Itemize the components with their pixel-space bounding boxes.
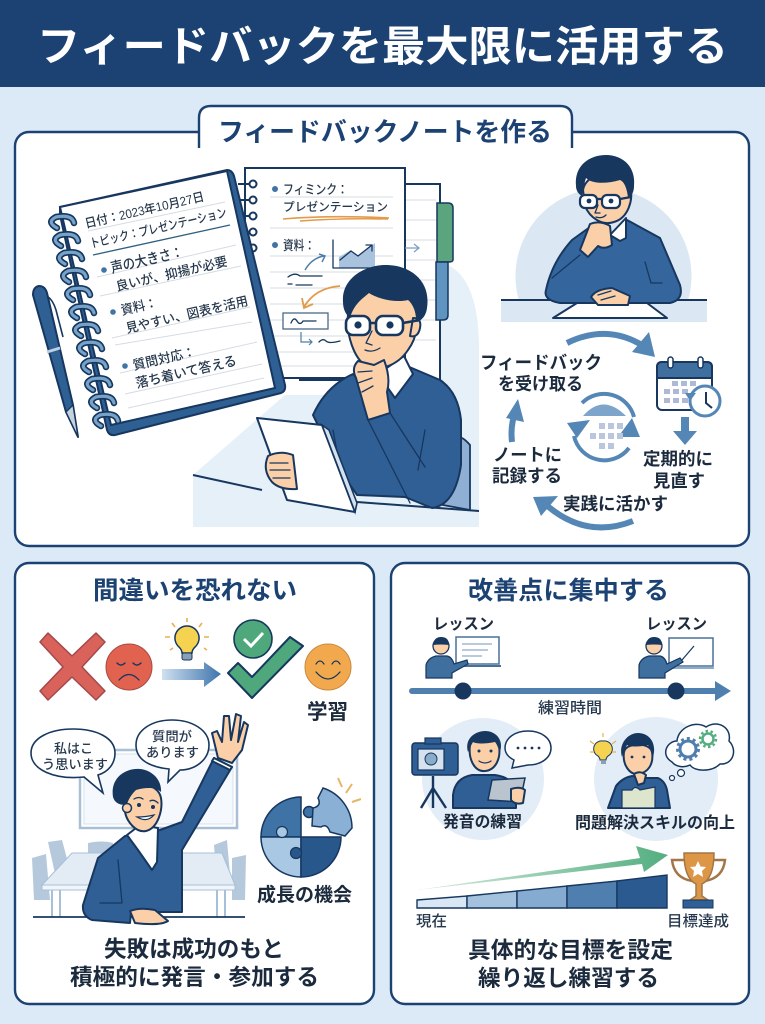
feedback cycle diagram: 実践に活かす (563, 494, 668, 514)
puzzle piece (622, 787, 655, 808)
person reading tablet (193, 265, 479, 512)
speech bubble: question (136, 720, 209, 782)
panel heading tab: フィードバックノートを作る (218, 117, 552, 147)
header band with title (0, 0, 765, 87)
open note page (238, 168, 419, 378)
notebook page (60, 171, 275, 425)
hand on chin (354, 360, 390, 420)
sweater (313, 366, 461, 508)
mini chart (333, 240, 375, 268)
collar (610, 218, 626, 241)
open note page: フィミンク： (283, 182, 348, 197)
back note sheet (300, 184, 453, 380)
heading: 改善点に集中する (468, 577, 669, 605)
feedback cycle diagram: ノートに (493, 445, 562, 465)
timeline: レッスン (433, 616, 494, 633)
speech bubble: my opinion: う思います (42, 757, 108, 772)
problem solving illustration (590, 717, 734, 841)
background blob behind man (193, 262, 479, 527)
label: problem-solving skills: 問題解決スキルの向上 (575, 814, 735, 832)
speech bubble: my opinion (31, 729, 115, 793)
label: growth opportunity: 成長の機会 (257, 883, 352, 906)
speech bubble: my opinion: 私はこ (54, 741, 93, 756)
face (125, 785, 161, 831)
icon: big check mark (228, 637, 303, 698)
panel: feedback note (15, 106, 749, 546)
orange underline (283, 217, 389, 221)
header band with title: フィードバックを最大限に活用する (37, 23, 728, 70)
open note page: プレゼンテーション (283, 199, 388, 214)
glasses (580, 195, 631, 208)
sweater (546, 220, 681, 303)
icon: green circle check (234, 620, 272, 658)
summary text: 具体的な目標を設定 (468, 938, 673, 963)
notebook with handwritten notes: 質問対応： (131, 344, 197, 373)
teacher at whiteboard right (639, 637, 714, 678)
person thinking at desk (501, 155, 707, 322)
timeline: レッスン (646, 616, 707, 633)
raised hand (212, 714, 248, 763)
summary text: 積極的に発言・参加する (70, 965, 319, 990)
binder rings (238, 180, 256, 252)
open note page: 資料： (283, 238, 315, 253)
feedback cycle diagram (480, 332, 720, 527)
chair (443, 437, 470, 510)
background circle (516, 188, 692, 300)
icon: red cross (40, 633, 105, 700)
staircase bar chart (417, 875, 667, 908)
notebook with handwritten notes: 落ち着いて答える (134, 352, 238, 391)
notebook on desk (553, 303, 667, 318)
notebook with handwritten notes (51, 170, 285, 435)
desk line (193, 475, 479, 511)
notebook with handwritten notes: 資料： (119, 295, 159, 318)
green tab (437, 203, 453, 262)
panel: don't fear mistakes (15, 563, 374, 1004)
notebook cover (60, 170, 285, 435)
blue tab (436, 262, 448, 320)
icon: puzzle sphere (261, 778, 361, 877)
summary text: 繰り返し練習する (478, 966, 659, 991)
forearm sleeve (368, 413, 425, 503)
notebook with handwritten notes: 日付：2023年10月27日 (84, 190, 206, 231)
icon: progress arrow (417, 846, 668, 890)
summary text (70, 937, 319, 990)
timeline (412, 616, 731, 717)
person (453, 775, 516, 808)
panel heading tab (199, 106, 572, 150)
hand on tablet (266, 453, 297, 489)
collar (378, 356, 413, 398)
label: learning: 学習 (307, 701, 348, 724)
icon: pen (33, 286, 78, 437)
summary text (468, 938, 673, 991)
arrow down (673, 417, 697, 445)
teacher at whiteboard left (426, 637, 501, 678)
speech bubble: question: 質問が (152, 729, 192, 744)
tablet (257, 418, 355, 512)
desk (501, 300, 707, 322)
feedback cycle diagram: 定期的に (643, 449, 713, 469)
timeline: 練習時間 (538, 699, 602, 717)
glasses (346, 316, 420, 335)
icon: light bulb (165, 618, 209, 660)
feedback cycle diagram: を受け取る (498, 374, 583, 394)
feedback cycle diagram: 見直す (653, 471, 705, 491)
hair (343, 265, 428, 322)
speech bubble (505, 731, 551, 768)
notebook with handwritten notes: 声の大きさ： (109, 243, 185, 277)
sweater and raised arm (83, 758, 232, 923)
meeting room background (32, 750, 246, 917)
notebook with handwritten notes: 良いが、抑揚が必要 (114, 254, 229, 294)
icon: trophy (672, 853, 725, 908)
label: goal achieved: 目標達成 (667, 913, 729, 930)
pronunciation practice illustration (412, 718, 551, 840)
ear (410, 318, 420, 336)
icon: sad face (106, 644, 152, 690)
speech bubble: question: あります (146, 745, 199, 760)
collar and shirt (127, 825, 158, 870)
light bulb (590, 733, 616, 764)
hand on table (130, 909, 168, 924)
hair (113, 769, 161, 805)
arrow (162, 662, 221, 687)
tablet (488, 778, 525, 802)
face (348, 289, 417, 368)
thought cloud (666, 724, 734, 770)
label: pronunciation practice: 発音の練習 (443, 812, 522, 831)
hand on desk (591, 288, 630, 305)
notebook with handwritten notes: 見やすい、図表を活用 (124, 293, 249, 336)
sketch arrows and notes (283, 244, 419, 345)
cycle arrows (512, 334, 645, 527)
spiral binding (51, 216, 118, 426)
label: current: 現在 (416, 913, 447, 930)
panel: focus on improvement (391, 563, 749, 1004)
icon: refresh calendar (567, 394, 640, 460)
icon: calendar (657, 357, 720, 416)
notebook with handwritten notes: トピック：プレゼンテーション (88, 205, 228, 251)
heading: 間違いを恐れない (93, 577, 297, 605)
icon: smiling face (305, 644, 351, 690)
ear (122, 804, 132, 812)
hair (576, 155, 634, 197)
person (608, 776, 670, 808)
person raising hand (83, 714, 248, 924)
gears (680, 741, 696, 757)
summary text: 失敗は成功のもと (104, 937, 284, 962)
feedback cycle diagram: フィードバック (480, 353, 602, 373)
face (583, 174, 631, 223)
hand on chin (580, 222, 612, 257)
feedback cycle diagram: 記録する (492, 466, 562, 486)
camera and tripod (412, 738, 458, 808)
